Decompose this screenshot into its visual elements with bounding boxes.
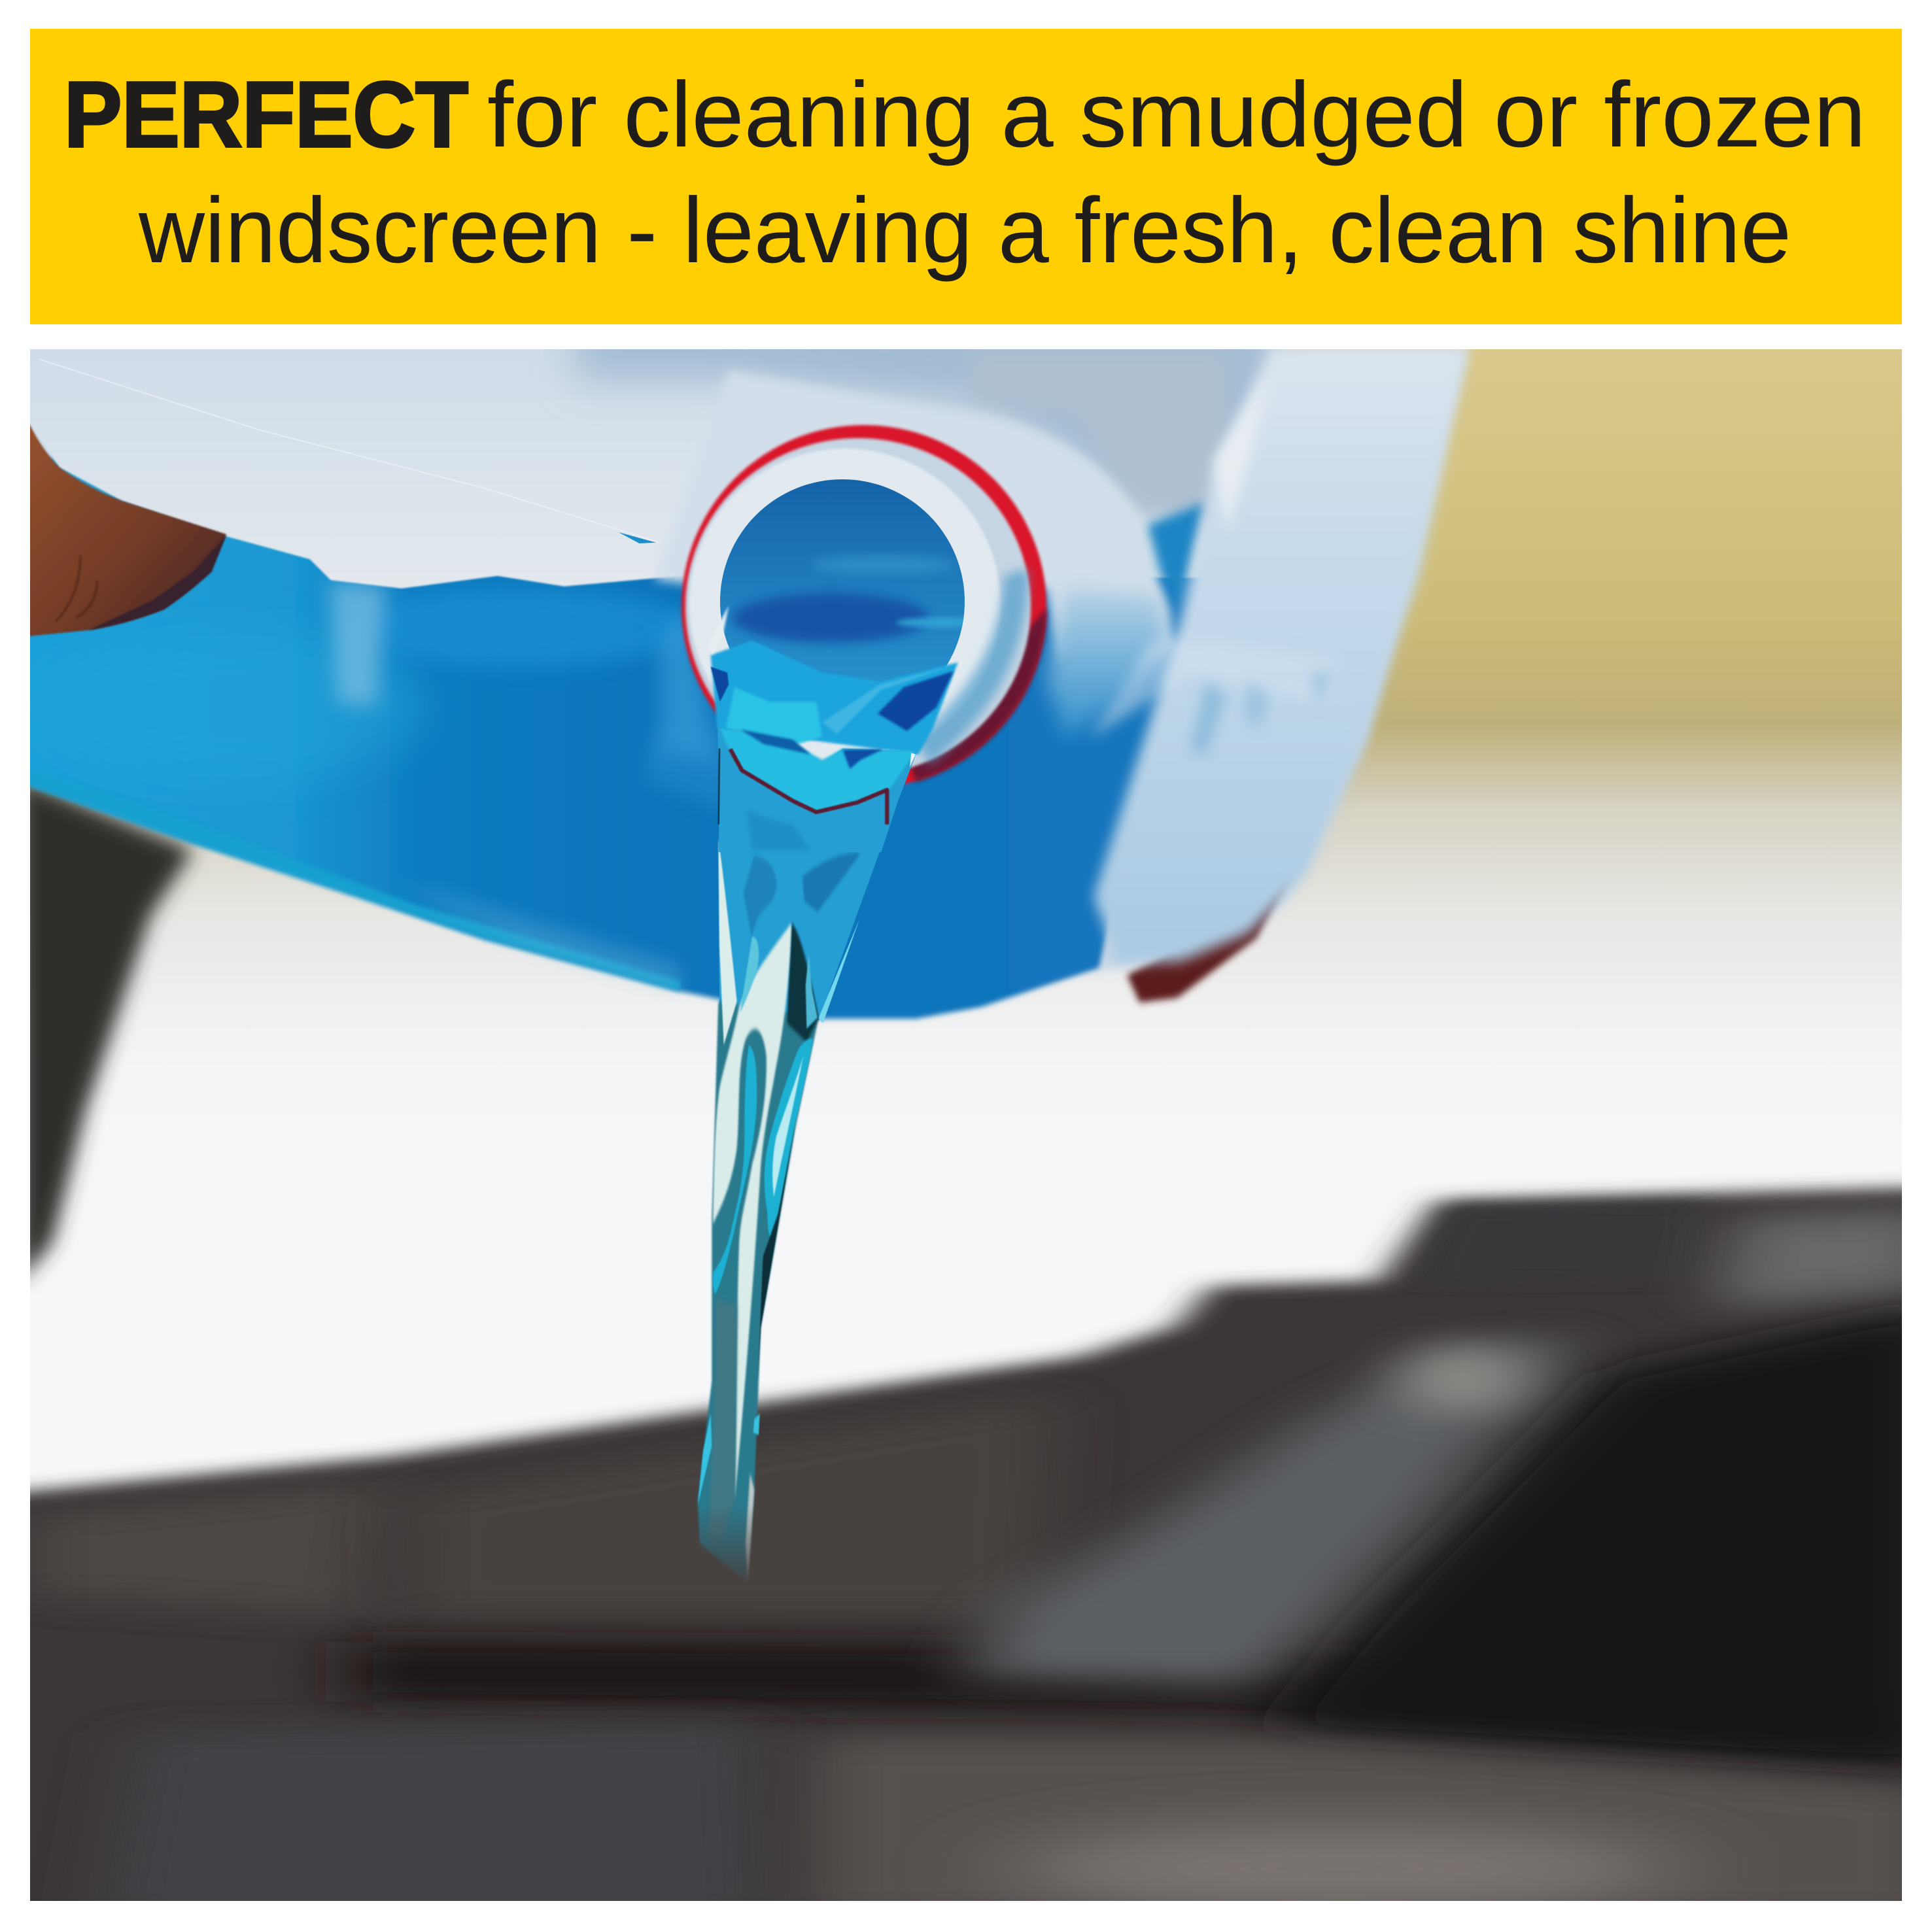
dark core <box>787 923 819 1042</box>
white swirl <box>713 923 791 1500</box>
bottle base stain <box>1127 874 1290 1002</box>
liquid spilling over the lip <box>707 606 958 852</box>
headline banner <box>30 29 1902 324</box>
blurred dark engine bay <box>0 1188 1932 1929</box>
blurred background wall and white bonnet <box>30 349 1902 1482</box>
bottle empty top <box>26 347 1277 589</box>
bottle neck boss <box>654 370 1173 660</box>
red seal ring <box>681 425 1046 789</box>
blue inlet <box>1148 502 1206 608</box>
headline line 1: for cleaning a smudged or frozen <box>487 63 1866 167</box>
stream mid section <box>698 839 881 1587</box>
light reflection stripe in liquid <box>330 582 386 706</box>
bottle upper shadow <box>576 314 1275 523</box>
bottle opening <box>720 479 965 724</box>
dark lip refraction line <box>731 749 887 825</box>
finger <box>26 422 226 636</box>
bottle base shape <box>20 349 1466 981</box>
bottle liquid <box>20 458 1243 1019</box>
bottle body <box>20 314 1469 1019</box>
headline line 2: windscreen - leaving a fresh, clean shine <box>138 179 1791 282</box>
cyan-white blob <box>765 1039 813 1238</box>
liquid swirls in opening <box>733 556 988 643</box>
dark post at left <box>20 778 193 1282</box>
dark right edge <box>757 1121 796 1381</box>
white collar <box>685 438 1031 776</box>
stream tail <box>708 1300 737 1544</box>
headline line 1: PERFECT <box>64 63 468 167</box>
bottle right panel <box>1090 347 1469 964</box>
cyan curl <box>713 1045 757 1294</box>
stream top <box>717 712 917 852</box>
neck ring <box>681 425 1046 789</box>
water stream <box>698 606 958 1587</box>
stream lower body <box>698 1002 819 1582</box>
